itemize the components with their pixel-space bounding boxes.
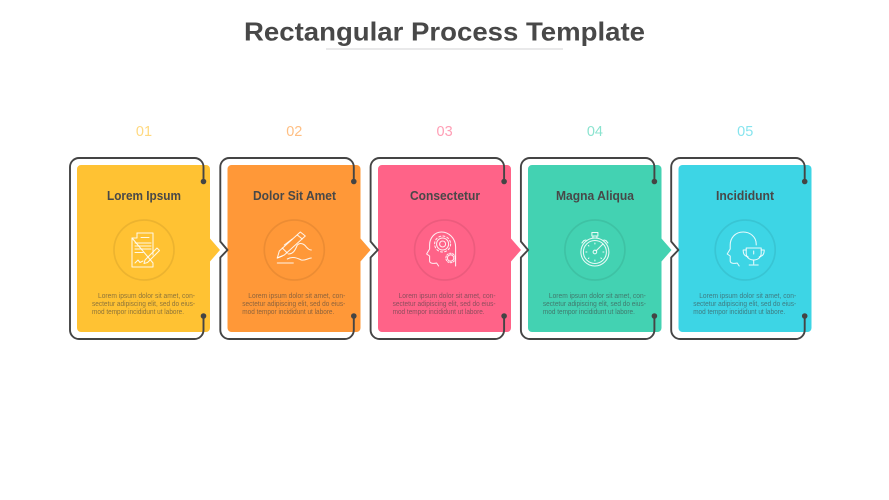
step number 04: 04 — [587, 124, 603, 140]
icon circle — [415, 220, 475, 280]
body text: sectetur adipiscing elit, sed do eius- — [92, 301, 196, 308]
body text: sectetur adipiscing elit, sed do eius- — [393, 301, 496, 308]
outline bracket with notch — [521, 158, 654, 339]
panel: step 2 — [220, 124, 370, 339]
card background with arrow — [528, 165, 672, 332]
body text: mod tempor incididunt ut labore. — [242, 309, 334, 316]
step number 05: 05 — [737, 124, 753, 140]
title: Rectangular Process Template — [244, 16, 645, 46]
icon: hand writing — [277, 232, 311, 263]
icon circle — [565, 220, 625, 280]
body text: mod tempor incididunt ut labore. — [393, 309, 485, 316]
icon: head with trophy — [727, 232, 764, 266]
body text: mod tempor incididunt ut labore. — [693, 309, 785, 316]
body text: mod tempor incididunt ut labore. — [92, 309, 184, 316]
title underline — [326, 48, 563, 50]
body text: Lorem ipsum dolor sit amet, con- — [399, 293, 496, 300]
card heading: Incididunt — [716, 189, 775, 203]
panel: step 1 — [70, 124, 220, 339]
panel: step 3 — [371, 124, 521, 339]
outline bracket with notch — [371, 158, 504, 339]
body text — [393, 293, 496, 316]
body text: Lorem ipsum dolor sit amet, con- — [248, 293, 346, 300]
body text: sectetur adipiscing elit, sed do eius- — [543, 301, 647, 308]
outline bracket — [70, 158, 204, 339]
step number 01: 01 — [136, 124, 152, 140]
outline bracket with notch — [671, 158, 805, 339]
body text — [92, 293, 196, 316]
body text — [242, 293, 346, 316]
card heading: Magna Aliqua — [556, 189, 635, 203]
connector dots — [351, 179, 357, 319]
connector dots — [652, 179, 657, 319]
icon: head with gears — [427, 232, 456, 266]
connector dots — [201, 179, 206, 319]
body text: Lorem ipsum dolor sit amet, con- — [549, 293, 647, 300]
icon: stopwatch — [581, 232, 609, 266]
card heading: Consectetur — [410, 189, 480, 203]
body text — [543, 293, 647, 316]
step number 03: 03 — [437, 124, 453, 140]
card background with arrow — [77, 165, 220, 332]
outline bracket with notch — [220, 158, 354, 339]
card background — [678, 165, 812, 332]
panel: step 4 — [521, 124, 672, 339]
card background with arrow — [378, 165, 521, 332]
connector dots — [501, 179, 507, 319]
body text: sectetur adipiscing elit, sed do eius- — [242, 301, 346, 308]
body text: sectetur adipiscing elit, sed do eius- — [693, 301, 797, 308]
icon: document and pen — [132, 233, 160, 267]
icon circle — [715, 220, 775, 280]
body text: Lorem ipsum dolor sit amet, con- — [98, 293, 196, 300]
body text — [693, 293, 797, 316]
step number 02: 02 — [286, 124, 302, 140]
card heading: Dolor Sit Amet — [253, 189, 337, 203]
body text: mod tempor incididunt ut labore. — [543, 309, 635, 316]
connector dots — [802, 179, 808, 319]
icon circle — [264, 220, 324, 280]
panel: step 5 — [671, 124, 812, 339]
card background with arrow — [228, 165, 370, 332]
icon circle — [114, 220, 174, 280]
body text: Lorem ipsum dolor sit amet, con- — [699, 293, 797, 300]
card heading: Lorem Ipsum — [107, 189, 181, 203]
